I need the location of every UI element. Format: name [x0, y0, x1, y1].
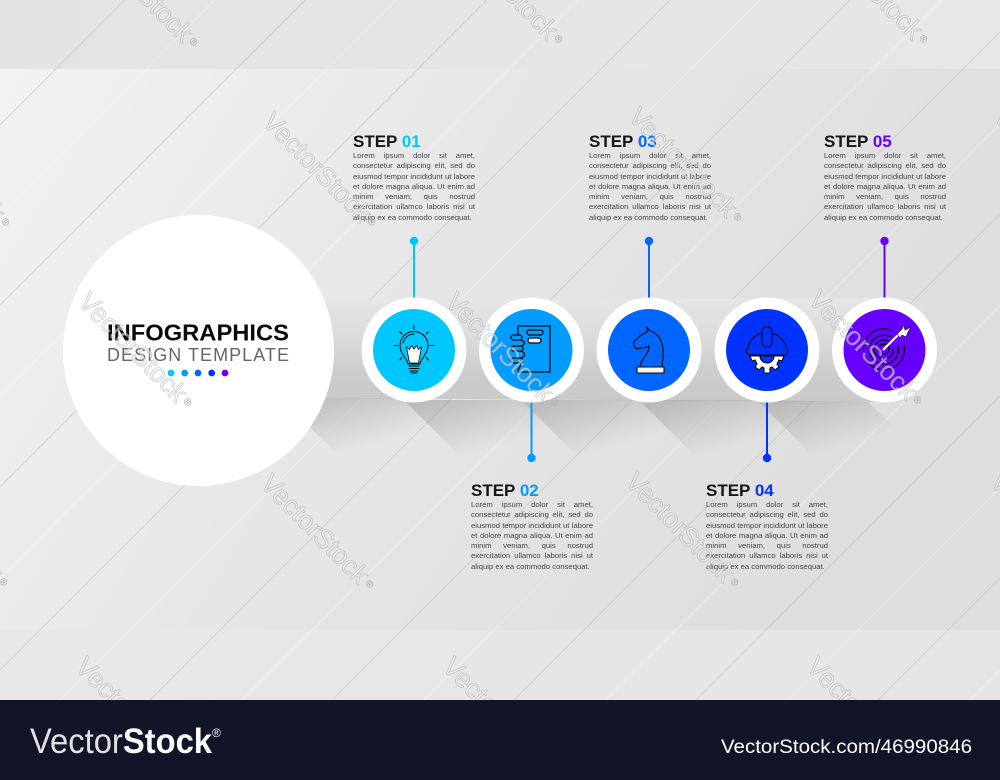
watermarks: ® [910, 394, 924, 408]
text block: step 03: minim veniam, quis nostrud [589, 192, 711, 201]
text block: step 02: minim veniam, quis nostrud [471, 541, 593, 550]
watermarks: VectorStock [623, 101, 743, 223]
watermarks: Vecto [437, 651, 505, 720]
text block: step 04: aliquip ex ea commodo consequat. [706, 562, 825, 570]
footer image id: VectorStock.com/46990846 [721, 736, 972, 758]
text block: step 05: exercitation ullamco laboris nisi ut [824, 202, 946, 211]
icon: chess knight [634, 327, 664, 373]
step circle 01 with bulb icon [362, 298, 466, 402]
connector: step 03 [645, 237, 653, 300]
footer logo: VectorStock [30, 722, 212, 761]
text block: step 01 [353, 132, 475, 222]
watermarks: ® [362, 578, 376, 592]
text block: step 04: consectetur adipiscing elit, sed do [706, 510, 828, 519]
text block: step 05: eiusmod tempor incididunt ut labore [824, 172, 946, 180]
watermarks: ® [180, 396, 194, 410]
text block: step 02 [471, 481, 593, 570]
text block: step 05: Lorem ipsum dolor sit amet, [824, 151, 946, 160]
step circle 04 with helmet and gear icon [714, 298, 820, 402]
watermarks: ® [547, 396, 561, 410]
text block: step 03: Lorem ipsum dolor sit amet, [589, 151, 711, 160]
text block: step 02: exercitation ullamco laboris nisi ut [471, 551, 593, 560]
watermarks: Vecto [70, 651, 138, 720]
text block: step 04 [706, 481, 828, 570]
text: STEP 04 [706, 481, 774, 500]
icon: target with dart [863, 325, 911, 370]
watermarks: VectorStock [257, 106, 377, 228]
watermarks: ® [730, 211, 744, 225]
text block: step 03: aliquip ex ea commodo consequat. [589, 212, 708, 222]
watermarks: VectorStock [255, 468, 375, 590]
text block: step 02: Lorem ipsum dolor sit amet, [471, 500, 593, 509]
footer bar [0, 700, 1000, 780]
text: STEP 03 [589, 132, 657, 151]
text block: step 03: exercitation ullamco laboris nisi ut [589, 202, 711, 211]
text block: step 05: consectetur adipiscing elit, sed do [824, 161, 946, 170]
title: INFOGRAPHICS [107, 320, 289, 346]
palette dots [168, 370, 228, 376]
text block: step 02: et dolore magna aliqua. Ut enim ad [471, 531, 593, 540]
step circle 03 with chess knight icon [596, 298, 702, 402]
watermarks: ® [727, 576, 741, 590]
subtitle: DESIGN TEMPLATE [107, 345, 289, 365]
text block: step 01: minim veniam, quis nostrud [353, 192, 475, 201]
watermarks: VectorStock [440, 286, 560, 408]
text block: step 04: Lorem ipsum dolor sit amet, [706, 500, 828, 509]
text block: step 01: consectetur adipiscing elit, sed do [353, 161, 475, 170]
watermarks: ® [186, 36, 200, 50]
shadow band behind the step circles [280, 298, 922, 454]
text block: step 03: consectetur adipiscing elit, sed do [589, 161, 711, 170]
text block: step 04: et dolore magna aliqua. Ut enim ad [706, 531, 828, 540]
panel: title circle [63, 215, 334, 486]
connector: step 04 [763, 400, 771, 462]
connector: step 02 [527, 400, 536, 462]
icon: helmet and gear [746, 326, 788, 373]
text block: step 01: exercitation ullamco laboris nisi ut [353, 202, 475, 211]
watermarks: VectorStock [620, 466, 740, 588]
text block: step 02: aliquip ex ea commodo consequat. [471, 562, 590, 570]
registered mark: ® [212, 726, 221, 740]
text: STEP 01 [353, 132, 421, 151]
text block: step 01: aliquip ex ea commodo consequat. [353, 212, 472, 222]
step circle 05 with target icon [832, 298, 937, 402]
icon: light bulb [394, 326, 434, 373]
watermarks: VectorStock [803, 284, 923, 406]
connector: step 01 [410, 237, 418, 300]
text block: step 05: aliquip ex ea commodo consequat. [824, 212, 943, 222]
icon: notebook [511, 326, 550, 372]
text block: step 04: exercitation ullamco laboris nisi ut [706, 551, 828, 560]
text block: step 05: minim veniam, quis nostrud [824, 192, 946, 201]
watermarks: Vecto [801, 651, 869, 720]
step circle 02 with notebook icon [479, 298, 584, 402]
watermarks: ® [551, 33, 565, 47]
text block: step 01: et dolore magna aliqua. Ut enim ad [353, 182, 475, 191]
text block: step 02: consectetur adipiscing elit, sed do [471, 510, 593, 519]
text block: step 05 [824, 132, 946, 222]
watermarks: VectorStock [73, 286, 193, 408]
text block: step 04: minim veniam, quis nostrud [706, 541, 828, 550]
text block: step 01: eiusmod tempor incididunt ut labore [353, 172, 475, 180]
text: STEP 02 [471, 481, 539, 500]
text block: step 03: et dolore magna aliqua. Ut enim ad [589, 182, 711, 191]
connector: step 05 [880, 237, 889, 300]
text block: step 02: eiusmod tempor incididunt ut labore [471, 520, 593, 530]
text block: step 01: Lorem ipsum dolor sit amet, [353, 151, 475, 160]
text: STEP 05 [824, 132, 892, 151]
watermarks: ® [916, 33, 930, 47]
watermarks: ® [364, 216, 378, 230]
text block: step 03 [589, 132, 711, 222]
text block: step 04: eiusmod tempor incididunt ut labore [706, 520, 828, 530]
text block: step 03: eiusmod tempor incididunt ut labore [589, 172, 711, 180]
text block: step 05: et dolore magna aliqua. Ut enim ad [824, 182, 946, 191]
